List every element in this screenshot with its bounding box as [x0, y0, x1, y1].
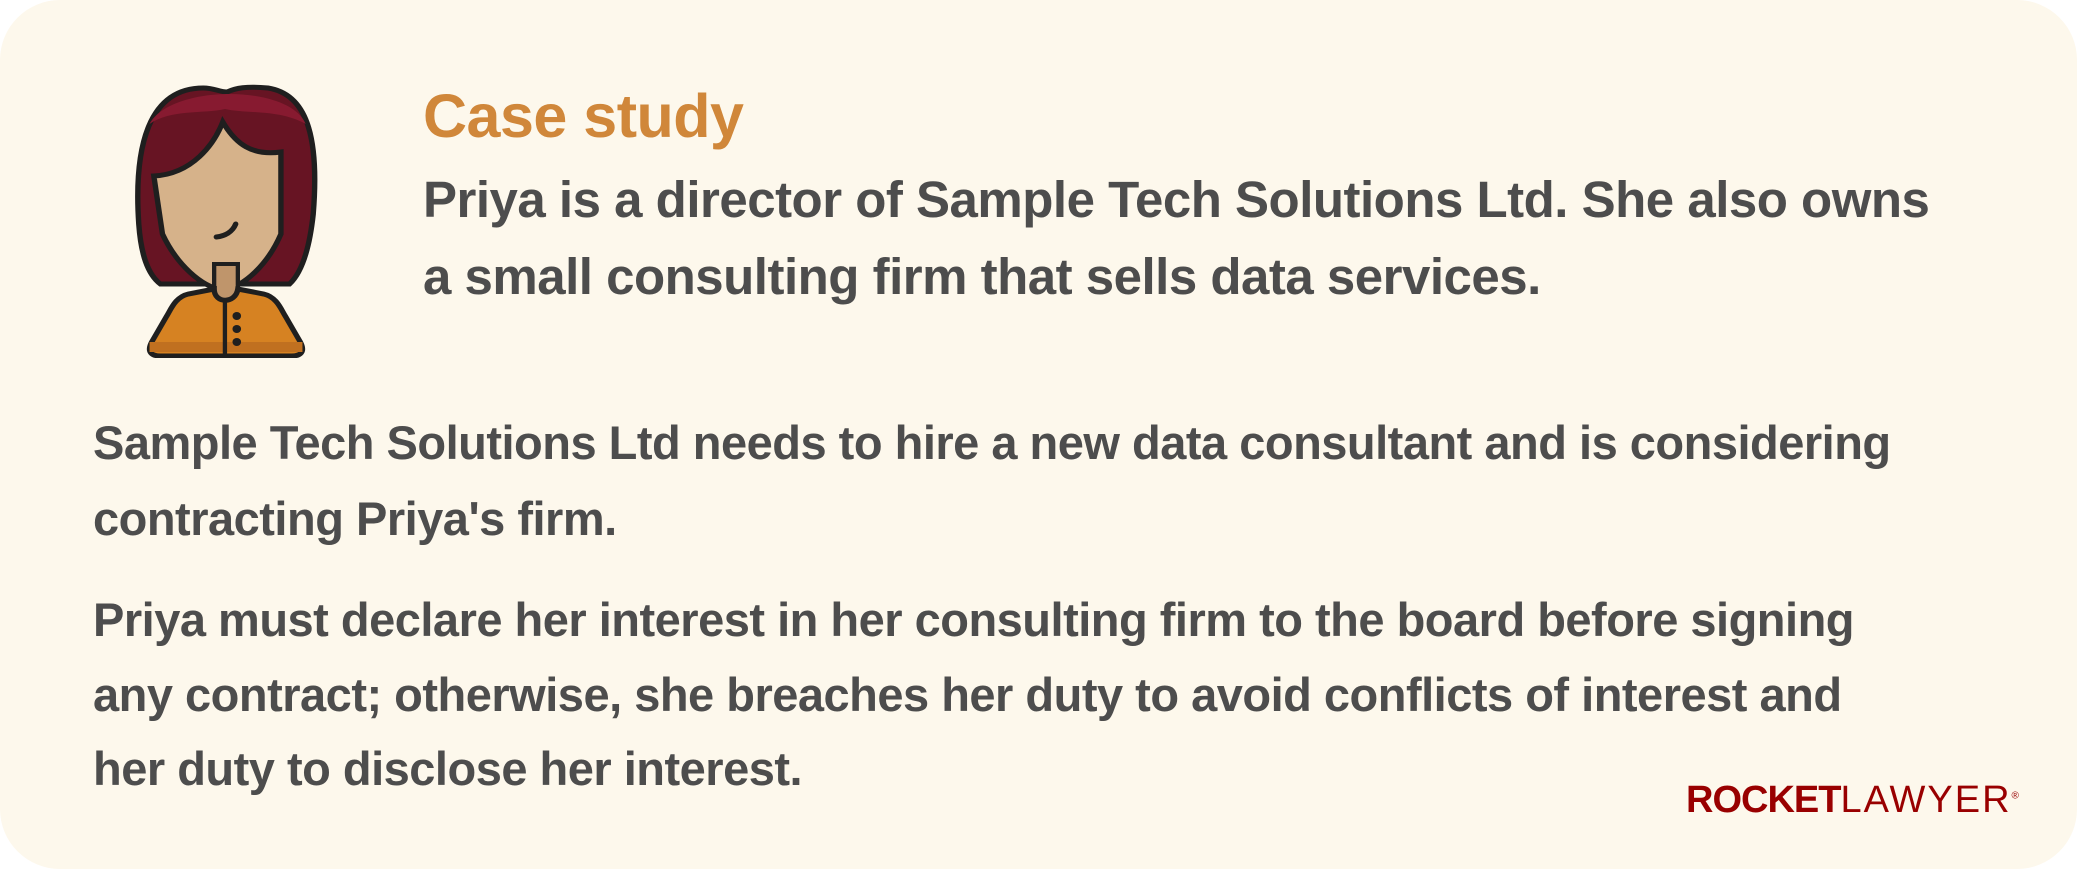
text block: paragraph 2: [93, 593, 1854, 795]
text block: intro: a small consulting firm that sells data services.: [423, 248, 1541, 305]
text block: paragraph 2: her duty to disclose her interest.: [93, 742, 802, 795]
logo: Rocket Lawyer: ROCKETLAWYER®: [1686, 779, 2019, 821]
text block: intro: [423, 171, 1929, 305]
text block: paragraph 2: any contract; otherwise, she breaches her duty to avoid conflicts of interest and: [93, 668, 1842, 721]
text block: paragraph 1: contracting Priya's firm.: [93, 492, 617, 545]
title: Case study: [423, 82, 743, 150]
text block: paragraph 1: Sample Tech Solutions Ltd needs to hire a new data consultant and is considering: [93, 416, 1891, 469]
icon: woman avatar: [135, 84, 318, 358]
text block: paragraph 1: [93, 416, 1891, 545]
text block: paragraph 2: Priya must declare her interest in her consulting firm to the board before signing: [93, 593, 1854, 646]
text block: intro: Priya is a director of Sample Tech Solutions Ltd. She also owns: [423, 171, 1929, 228]
